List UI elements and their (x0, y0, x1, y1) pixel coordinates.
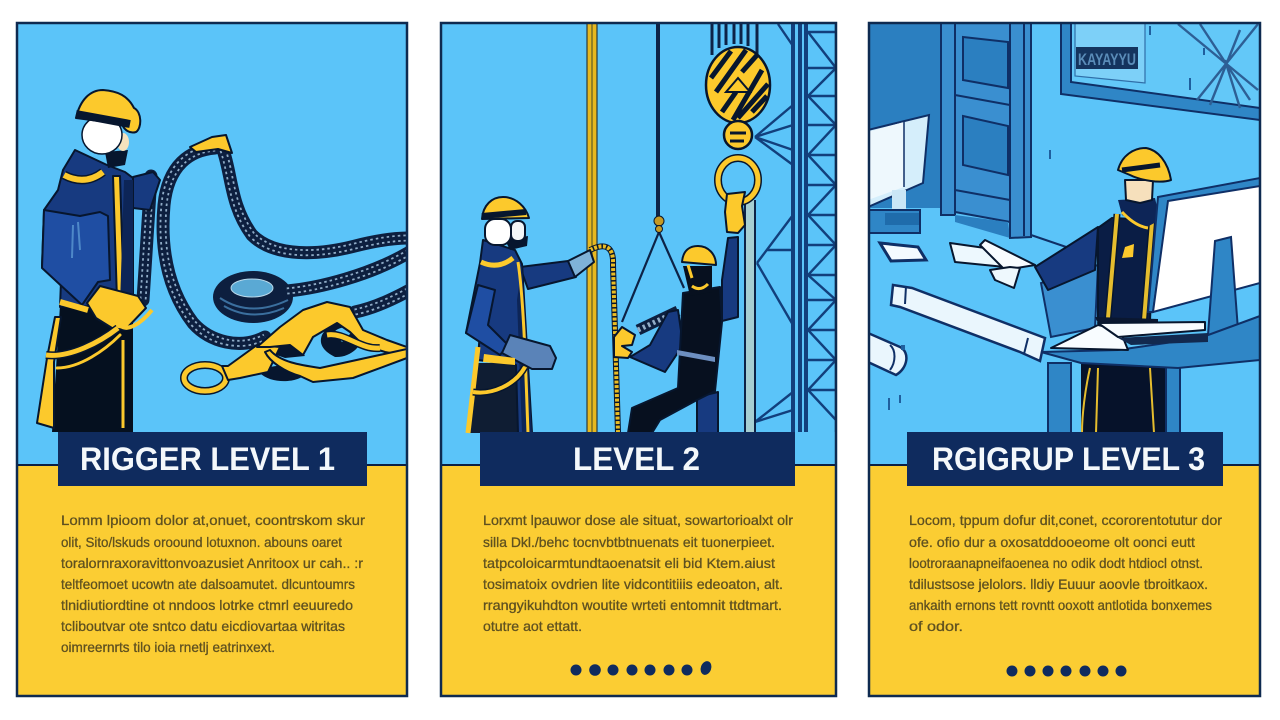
banner: rigger level 3: RGIGRUP LEVEL 3 (932, 441, 1205, 477)
small monitor (868, 115, 929, 233)
description text: tcliboutvar ote sntco datu eicdiovartaa witritas (61, 618, 345, 634)
climbing rope (590, 246, 618, 433)
big monitor (1148, 178, 1260, 345)
gold snap hook (184, 302, 407, 391)
window with lattice view: KAYAYYU (1078, 50, 1136, 69)
yellow glove on rope (190, 135, 232, 153)
banner: rigger level 1: RIGGER LEVEL 1 (80, 441, 335, 477)
banner: rigger level 1 (58, 432, 367, 486)
papers and hand (950, 240, 1035, 288)
description text: tlnidiutiordtine ot nndoos lotrke ctmrl eeuuredo (61, 597, 353, 613)
lattice tower (755, 22, 836, 432)
wall and door (868, 22, 1075, 250)
window with lattice view (1061, 22, 1260, 120)
banner: level 2: LEVEL 2 (573, 441, 700, 477)
illustration: rigger at workstation (868, 22, 1260, 433)
description text: rrangyikuhdton woutite wrteti entomnit ttdtmart. (483, 597, 782, 613)
pagination dots (570, 660, 713, 676)
description text: Lorxmt lpauwor dose ale situat, sowartorioalxt olr (483, 512, 793, 528)
desk and legs (1048, 362, 1180, 433)
suspension line and sling (622, 22, 684, 322)
description text (483, 512, 793, 634)
ropes (143, 148, 408, 343)
specks (888, 26, 1205, 410)
description text: tdilustsose jelolors. lldiy Euuur aoovle tbroitkaox. (909, 576, 1208, 592)
description text: of odor. (909, 618, 963, 634)
illustration: two riggers with crane hook (466, 22, 836, 434)
illustration: rigger holding rope and hook (37, 90, 408, 432)
rigger figure (37, 90, 160, 432)
worker right (614, 237, 738, 433)
description text: silla Dkl./behc tocnvbtbtnuenats eit tuonerpieet. (483, 534, 775, 550)
crane hook block (706, 22, 770, 433)
desk top with paper and keyboard (1041, 316, 1260, 368)
worker at desk (1035, 148, 1171, 337)
description text: tatpcoloicarmtundtaoenatsit eli bid Ktem.aiust (483, 555, 775, 571)
keyboard (880, 243, 926, 261)
panel: level 2 (440, 22, 837, 697)
description text: otutre aot ettatt. (483, 618, 582, 634)
rope coil (213, 271, 293, 323)
description text: Lomm lpioom dolor at,onuet, coontrskom skur (61, 512, 365, 528)
panel: rigger level 3 (868, 22, 1261, 697)
description text: tosimatoix ovdrien lite vidcontitiiis edeoaton, alt. (483, 576, 783, 592)
description text (61, 512, 365, 655)
yellow pole (587, 22, 597, 434)
worker left (466, 197, 594, 433)
description text: ofe. ofio dur a oxosatddooeome olt oonci eutt (909, 534, 1195, 550)
description text: lootroraanapneifaoenea no odik dodt htdiocl otnst. (909, 555, 1203, 571)
description text: toralornraxoravittonvoazusiet Anritoox ur cah.. :r (61, 555, 363, 571)
description text (909, 512, 1222, 634)
description text: Locom, tppum dofur dit,conet, ccororentotutur dor (909, 512, 1222, 528)
description text: teltfeomoet ucowtn ate dalsoamutet. dlcuntoumrs (61, 576, 355, 592)
description text: olit, Sito/lskuds oroound lotuxnon. abouns oaret (61, 534, 342, 550)
description text: oimreernrts tilo ioia rnetlj eatrinxext. (61, 639, 275, 655)
banner: level 2 (480, 432, 795, 486)
pagination dots (1006, 666, 1126, 676)
description text: ankaith ernons tett rovntt ooxott antlotida bonxemes (909, 597, 1212, 613)
panel: rigger level 1 (16, 22, 408, 697)
blueprint rolls (868, 285, 1045, 375)
banner: rigger level 3 (907, 432, 1223, 486)
